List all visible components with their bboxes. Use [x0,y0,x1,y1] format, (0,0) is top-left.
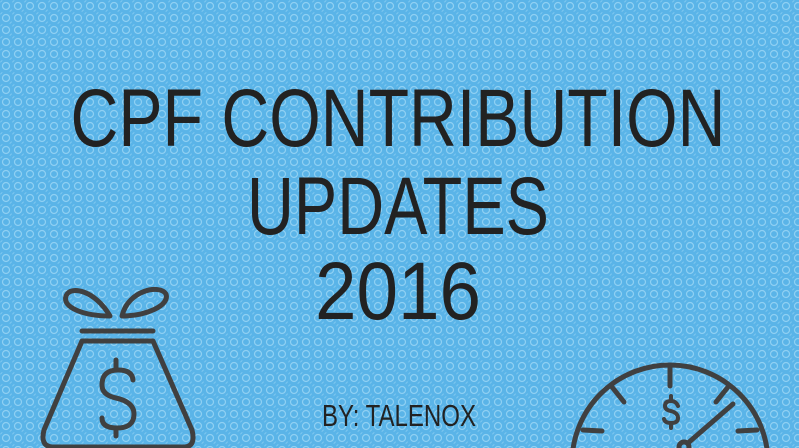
byline: BY: TALENOX [322,398,476,433]
title [70,73,726,337]
icon: gauge [572,365,768,448]
icon: money bag [43,289,193,447]
title: UPDATES [247,161,549,252]
title: 2016 [315,246,481,337]
